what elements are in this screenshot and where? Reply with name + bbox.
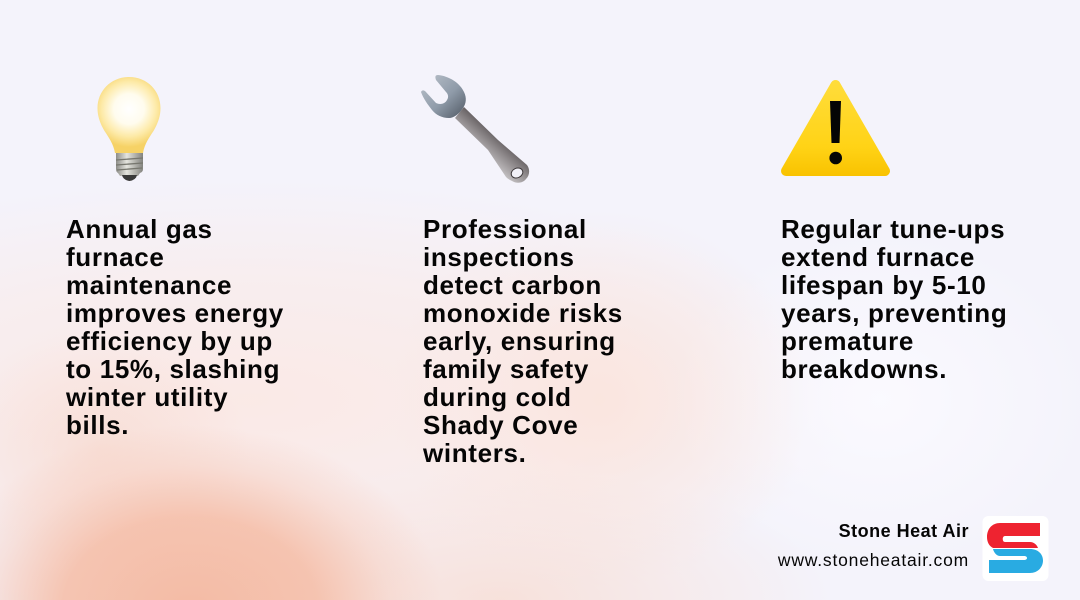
text: lifespan: premature	[781, 326, 914, 356]
text: efficiency: bills.	[66, 410, 129, 440]
text: safety: Shady Cove	[423, 410, 578, 440]
text: efficiency: improves energy	[66, 298, 284, 328]
text: efficiency: Annual gas	[66, 214, 213, 244]
text: safety	[422, 214, 623, 468]
text: efficiency	[66, 214, 284, 440]
website: www.stoneheatair.com	[778, 550, 969, 570]
icon: light bulb	[98, 77, 160, 181]
text: efficiency: furnace	[66, 242, 164, 272]
icon: wrench	[421, 75, 530, 183]
text: safety: family safety	[423, 354, 589, 384]
text: lifespan: lifespan by 5-10	[781, 270, 986, 300]
text: safety: monoxide risks	[423, 298, 623, 328]
text: efficiency: maintenance	[66, 270, 232, 300]
text: safety: early, ensuring	[423, 326, 616, 356]
logo	[982, 516, 1048, 581]
icon: warning sign	[781, 80, 890, 176]
text: safety: winters.	[423, 438, 526, 468]
text: lifespan: breakdowns.	[781, 354, 947, 384]
text: safety: detect carbon	[423, 270, 602, 300]
text: efficiency: efficiency by up	[66, 326, 273, 356]
text: efficiency: to 15%, slashing	[66, 354, 280, 384]
text: lifespan: extend furnace	[781, 242, 975, 272]
text: lifespan: years, preventing	[781, 298, 1007, 328]
text: efficiency: winter utility	[66, 382, 228, 412]
text: safety: during cold	[423, 382, 572, 412]
text: lifespan: Regular tune-ups	[781, 214, 1005, 244]
brand name: Stone Heat Air	[839, 521, 969, 541]
text: safety: Professional	[423, 214, 587, 244]
text: lifespan	[781, 214, 1007, 384]
text: safety: inspections	[423, 242, 575, 272]
